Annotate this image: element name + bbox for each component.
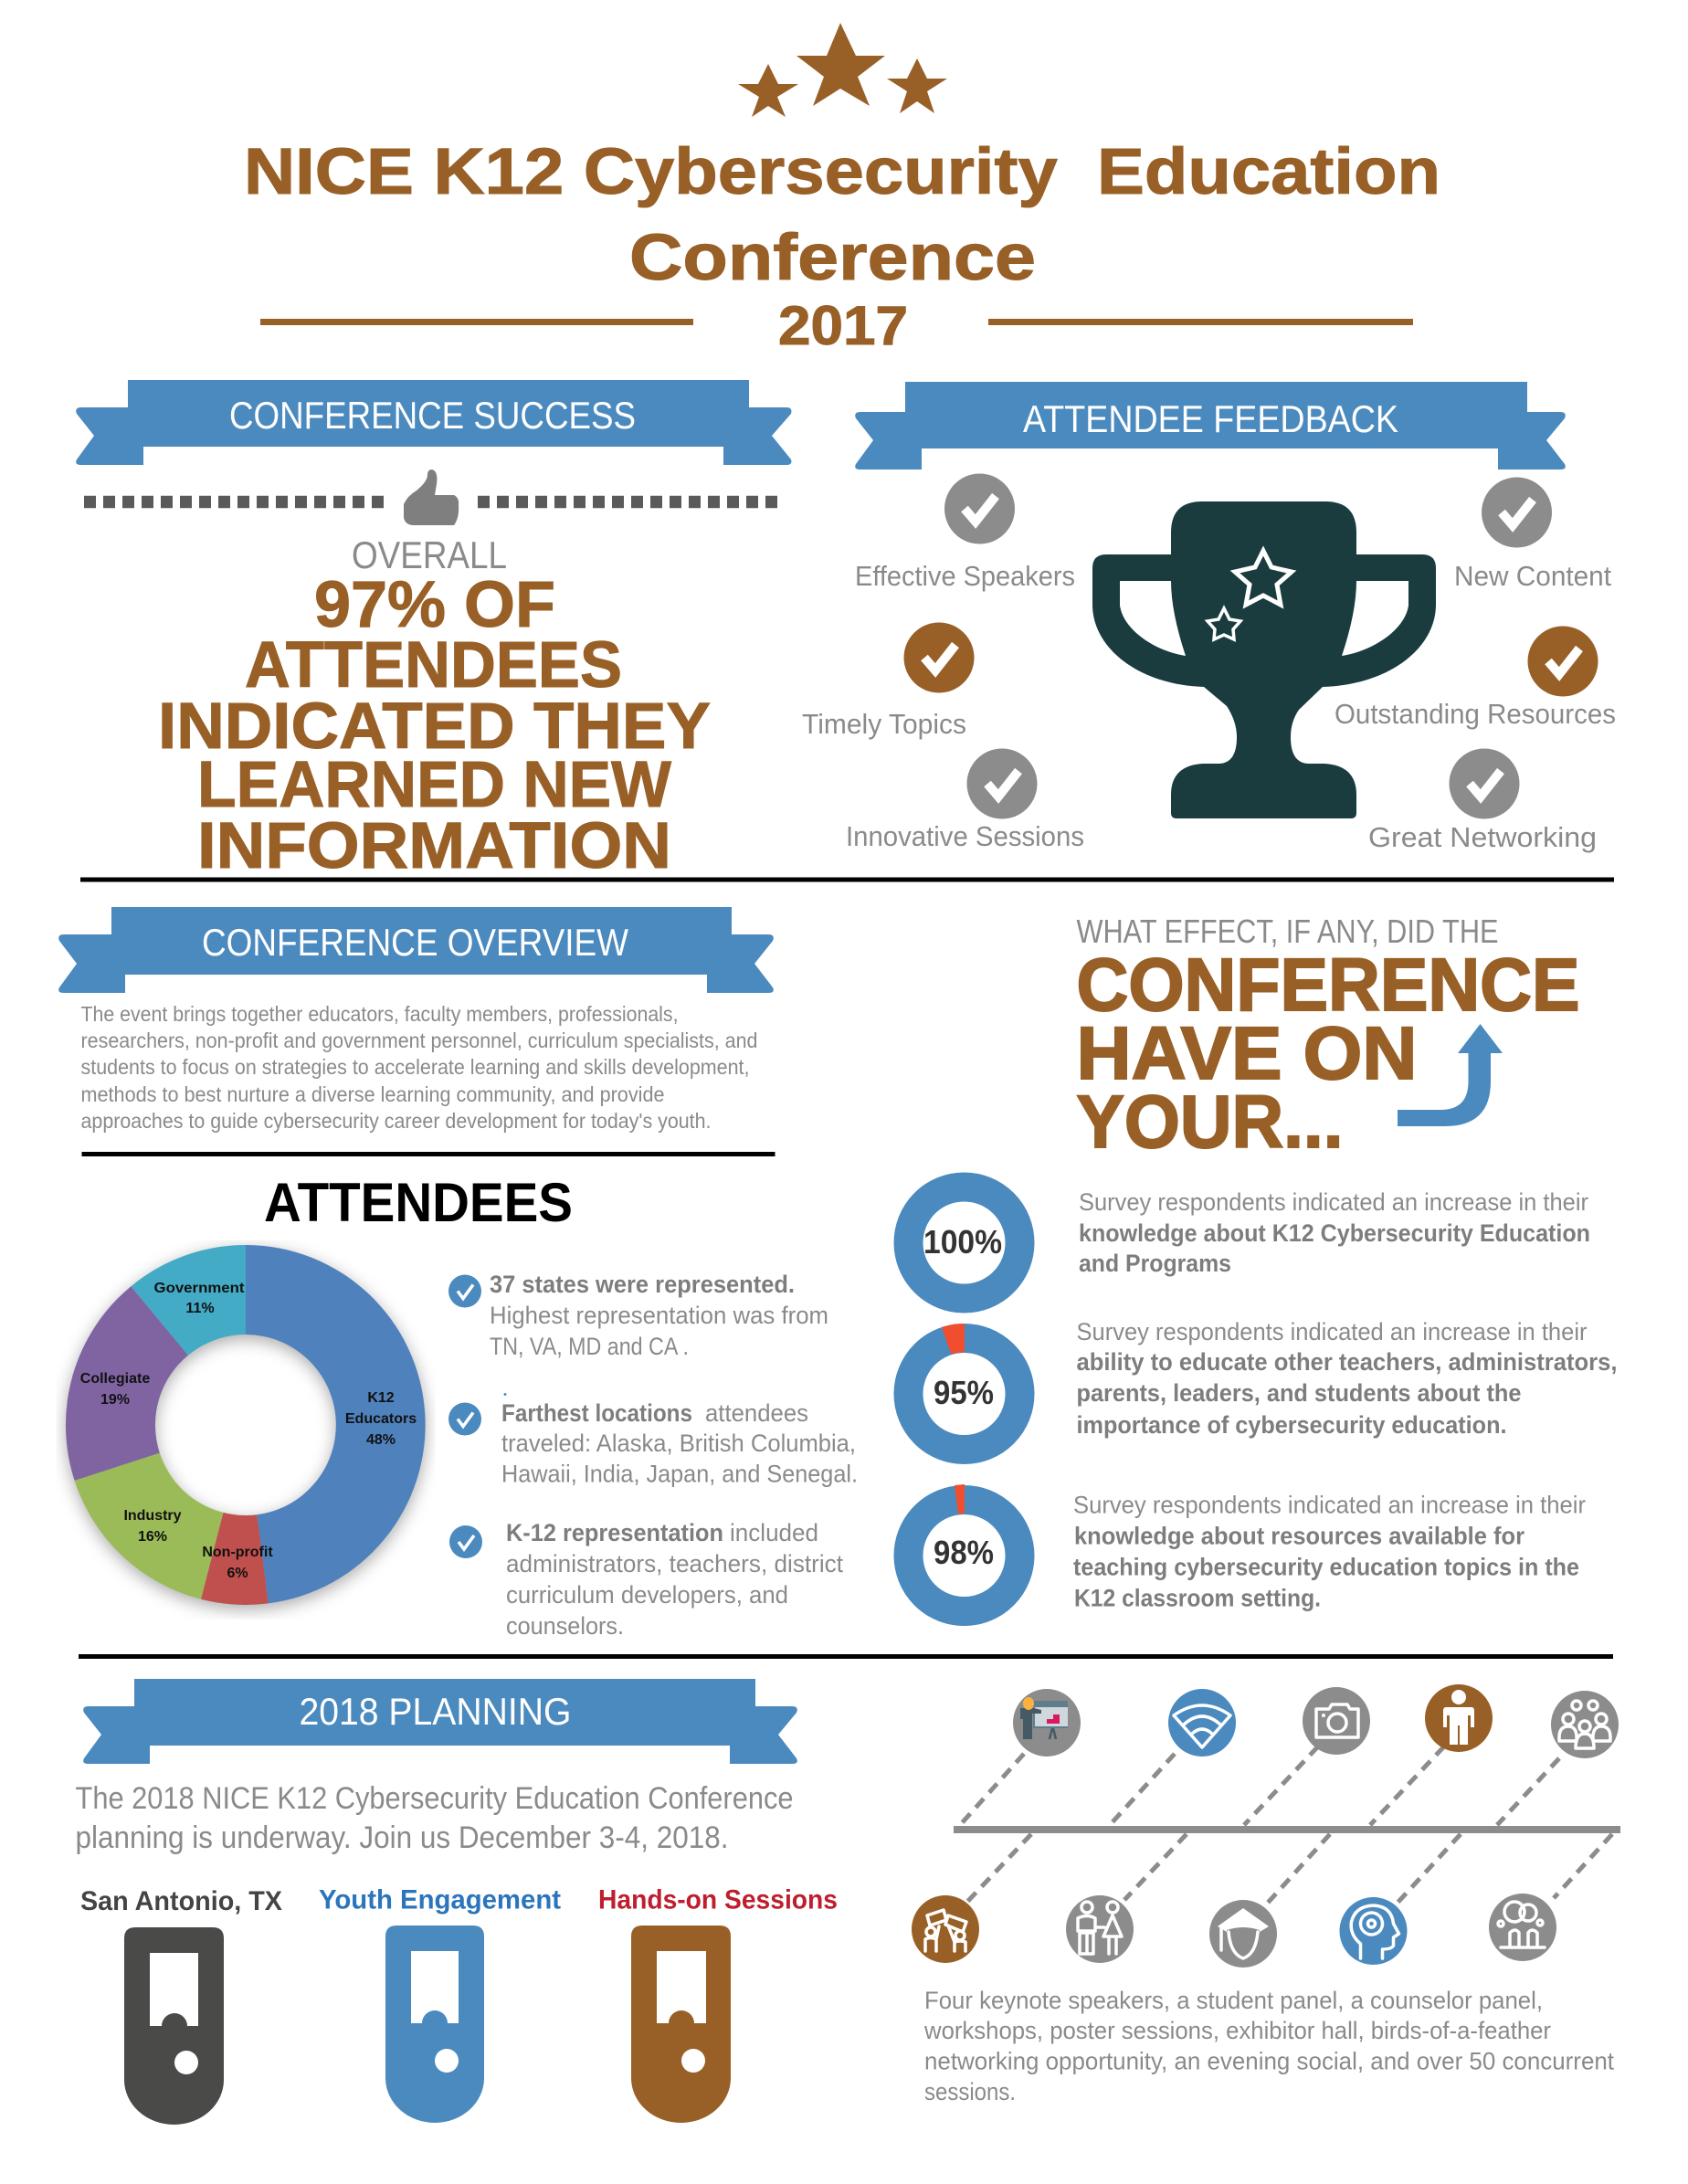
ribbon heading: conference success: CONFERENCE SUCCESS xyxy=(229,394,636,437)
survey result: ability to educate others: ability to educate other teachers, administrators, xyxy=(1076,1348,1617,1376)
activities paragraph: workshops, poster sessions, exhibitor hall, birds-of-a-feather xyxy=(923,2017,1551,2044)
feedback item: new content xyxy=(1454,477,1611,592)
planning paragraph: planning is underway. Join us December 3-4, 2018. xyxy=(75,1820,729,1855)
feedback item: great networking: Great Networking xyxy=(1368,821,1597,853)
pin: Youth Engagement xyxy=(319,1885,561,2123)
statistic: 97 percent learned new information xyxy=(158,533,711,882)
icon: graduate xyxy=(1209,1900,1277,1968)
panel: conference success xyxy=(76,380,791,882)
ribbon heading: 2018 planning: 2018 PLANNING xyxy=(300,1690,572,1733)
pin: San Antonio, TX xyxy=(80,1886,282,2125)
planning paragraph: The 2018 NICE K12 Cybersecurity Education Conference xyxy=(75,1781,793,1816)
bullet: states represented: TN, VA, MD and CA . xyxy=(490,1333,689,1360)
icon: camera xyxy=(1303,1687,1370,1755)
icon: head with gear xyxy=(1339,1897,1407,1965)
feedback item: innovative sessions xyxy=(846,749,1084,852)
year with side rules: 2017 xyxy=(778,295,908,356)
bullet: farthest locations xyxy=(448,1393,858,1487)
pin: Youth Engagement: Youth Engagement xyxy=(319,1885,561,1915)
icon: mentors with speech xyxy=(1489,1894,1556,1961)
feedback item: effective speakers xyxy=(855,473,1075,592)
overview paragraph xyxy=(80,1002,758,1133)
survey result: knowledge about resources: Survey respondents indicated an increase in their xyxy=(1073,1491,1586,1518)
overview paragraph: students to focus on strategies to accelerate learning and skills development, xyxy=(80,1055,749,1079)
panel: conference overview xyxy=(58,907,774,1133)
timeline bar xyxy=(954,1826,1620,1833)
survey result: knowledge about resources: knowledge about resources available for xyxy=(1074,1522,1524,1549)
bullet: states represented: Highest representation was from xyxy=(490,1302,828,1329)
feedback item: outstanding resources: Outstanding Resources xyxy=(1335,698,1616,730)
overview paragraph: approaches to guide cybersecurity career development for today's youth. xyxy=(80,1109,711,1133)
overview paragraph: methods to best nurture a diverse learning community, and provide xyxy=(80,1082,665,1106)
donut chart: attendee breakdown: Industry xyxy=(123,1508,182,1524)
year with side rules xyxy=(260,295,1413,356)
feedback item: effective speakers: Effective Speakers xyxy=(855,560,1075,592)
feedback item: outstanding resources xyxy=(1335,627,1616,730)
planning paragraph xyxy=(75,1781,793,1855)
statistic: 97 percent learned new information: INDICATED THEY xyxy=(158,691,711,763)
statistic: 97 percent learned new information: LEARNED NEW xyxy=(197,749,671,821)
donut chart: attendee breakdown: 16% xyxy=(138,1529,167,1545)
feedback item: timely topics: Timely Topics xyxy=(802,708,966,740)
icon: trophy xyxy=(1092,501,1436,818)
survey result: knowledge about resources xyxy=(1073,1491,1586,1611)
activities paragraph: sessions. xyxy=(924,2078,1016,2105)
bullet: K-12 representation: curriculum developers, and xyxy=(506,1581,788,1609)
donut chart: attendee breakdown: Non-profit xyxy=(202,1545,273,1560)
feedback item: timely topics xyxy=(802,623,974,740)
arrow: up-turning blue arrow xyxy=(1398,1024,1503,1126)
progress ring: 98 percent: 98% xyxy=(934,1534,994,1571)
progress ring: 95 percent: 95% xyxy=(934,1374,994,1411)
bullet: states represented: 37 states were represented. xyxy=(490,1271,795,1298)
bullet: K-12 representation xyxy=(449,1519,843,1640)
progress ring: 100 percent: 100% xyxy=(923,1223,1002,1261)
bullet: farthest locations: traveled: Alaska, British Columbia, xyxy=(501,1430,856,1457)
survey result: ability to educate others: parents, leaders, and students about the xyxy=(1076,1379,1522,1407)
ribbon heading: conference overview xyxy=(58,907,774,993)
pin: San Antonio, TX: San Antonio, TX xyxy=(80,1886,282,1916)
survey result: ability to educate others: Survey respondents indicated an increase in their xyxy=(1076,1318,1588,1345)
panel: conference activities timeline xyxy=(912,1684,1620,2105)
heading: attendees: ATTENDEES xyxy=(264,1172,573,1233)
panel: attendee feedback xyxy=(802,382,1616,853)
survey result: knowledge about K12 cybersecurity education xyxy=(1079,1188,1590,1277)
bullet: farthest locations: Farthest locations xyxy=(501,1399,692,1427)
heading: what effect did the conference have xyxy=(1076,913,1580,1164)
survey result: ability to educate others xyxy=(1076,1318,1617,1439)
icon: protest signs xyxy=(912,1895,979,1963)
heading: what effect did the conference have: HAVE ON xyxy=(1076,1012,1418,1095)
feedback item: innovative sessions: Innovative Sessions xyxy=(846,820,1084,852)
survey result: knowledge about resources: K12 classroom setting. xyxy=(1074,1584,1321,1611)
ribbon heading: attendee feedback xyxy=(855,382,1566,470)
header: stars, title and year xyxy=(244,23,1440,356)
survey result: ability to educate others: importance of cybersecurity education. xyxy=(1076,1411,1507,1439)
bullet: states represented xyxy=(448,1271,828,1360)
ribbon heading: attendee feedback: ATTENDEE FEEDBACK xyxy=(1023,397,1398,440)
icon: boy and girl xyxy=(1066,1895,1134,1963)
dashed connectors xyxy=(960,1746,1612,1903)
bullet: K-12 representation: counselors. xyxy=(506,1612,624,1640)
panel: attendees xyxy=(66,1172,858,1640)
survey result: knowledge about resources: teaching cybersecurity education topics in the xyxy=(1073,1553,1579,1580)
bullet: farthest locations: Hawaii, India, Japan, and Senegal. xyxy=(501,1460,858,1487)
heading: what effect did the conference have: YOUR... xyxy=(1076,1081,1343,1164)
donut chart: attendee breakdown: Government xyxy=(153,1281,245,1296)
feedback item: new content: New Content xyxy=(1454,560,1611,592)
icon: presenter at chart xyxy=(1013,1689,1081,1757)
donut chart: attendee breakdown: Collegiate xyxy=(80,1371,150,1387)
panel: 2018 planning xyxy=(75,1679,838,2125)
activities paragraph: networking opportunity, an evening social, and over 50 concurrent xyxy=(924,2048,1614,2075)
activities paragraph xyxy=(923,1987,1614,2105)
title: Conference xyxy=(629,222,1036,294)
statistic: 97 percent learned new information: OVERALL xyxy=(352,533,507,576)
icon: three stars xyxy=(738,23,947,117)
pin: Hands-on Sessions xyxy=(598,1885,838,2123)
survey result: knowledge about K12 cybersecurity education: knowledge about K12 Cybersecurity Education xyxy=(1079,1219,1590,1247)
statistic: 97 percent learned new information: INFORMATION xyxy=(197,810,671,882)
feedback item: great networking xyxy=(1368,749,1597,853)
donut chart: attendee breakdown xyxy=(66,1245,426,1605)
ribbon heading: conference overview: CONFERENCE OVERVIEW xyxy=(202,921,628,964)
donut chart: attendee breakdown: 19% xyxy=(100,1392,130,1408)
donut chart: attendee breakdown: 48% xyxy=(366,1432,396,1448)
donut chart: attendee breakdown: 6% xyxy=(227,1566,248,1581)
statistic: 97 percent learned new information: 97% OF xyxy=(314,569,555,641)
icon: wifi xyxy=(1168,1689,1236,1757)
activities paragraph: Four keynote speakers, a student panel, a counselor panel, xyxy=(924,1987,1543,2014)
donut chart: attendee breakdown: K12 xyxy=(367,1390,395,1406)
survey result: knowledge about K12 cybersecurity education: Survey respondents indicated an increase in their xyxy=(1079,1188,1588,1216)
ribbon heading: conference success xyxy=(76,380,791,465)
panel: conference effect survey xyxy=(908,913,1617,1611)
bullet: K-12 representation: included xyxy=(730,1519,818,1546)
progress ring: 95 percent xyxy=(908,1324,1019,1450)
bullet: K-12 representation: K-12 representation xyxy=(506,1519,723,1546)
heading: what effect did the conference have: CONFERENCE xyxy=(1076,944,1580,1027)
progress ring: 98 percent xyxy=(908,1484,1019,1611)
donut chart: attendee breakdown: 11% xyxy=(185,1301,215,1316)
title xyxy=(244,136,1440,294)
icon: standing person xyxy=(1425,1684,1493,1752)
overview paragraph: The event brings together educators, faculty members, professionals, xyxy=(80,1002,678,1026)
dotted divider with thumbs up icon xyxy=(84,470,779,525)
ribbon heading: 2018 planning xyxy=(83,1679,797,1764)
survey result: knowledge about K12 cybersecurity education: and Programs xyxy=(1079,1250,1231,1277)
title: NICE K12 Cybersecurity Education xyxy=(244,136,1440,208)
statistic: 97 percent learned new information: ATTENDEES xyxy=(245,629,622,702)
bullet: farthest locations: attendees xyxy=(705,1399,808,1427)
heading: what effect did the conference have: WHAT EFFECT, IF ANY, DID THE xyxy=(1076,913,1498,950)
donut chart: attendee breakdown: Educators xyxy=(345,1411,417,1427)
bullet: K-12 representation: administrators, teachers, district xyxy=(506,1550,843,1577)
icon: crowd of people xyxy=(1551,1691,1619,1758)
progress ring: 100 percent xyxy=(908,1187,1019,1299)
pin: Hands-on Sessions: Hands-on Sessions xyxy=(598,1885,838,1915)
overview paragraph: researchers, non-profit and government personnel, curriculum specialists, and xyxy=(80,1029,758,1052)
